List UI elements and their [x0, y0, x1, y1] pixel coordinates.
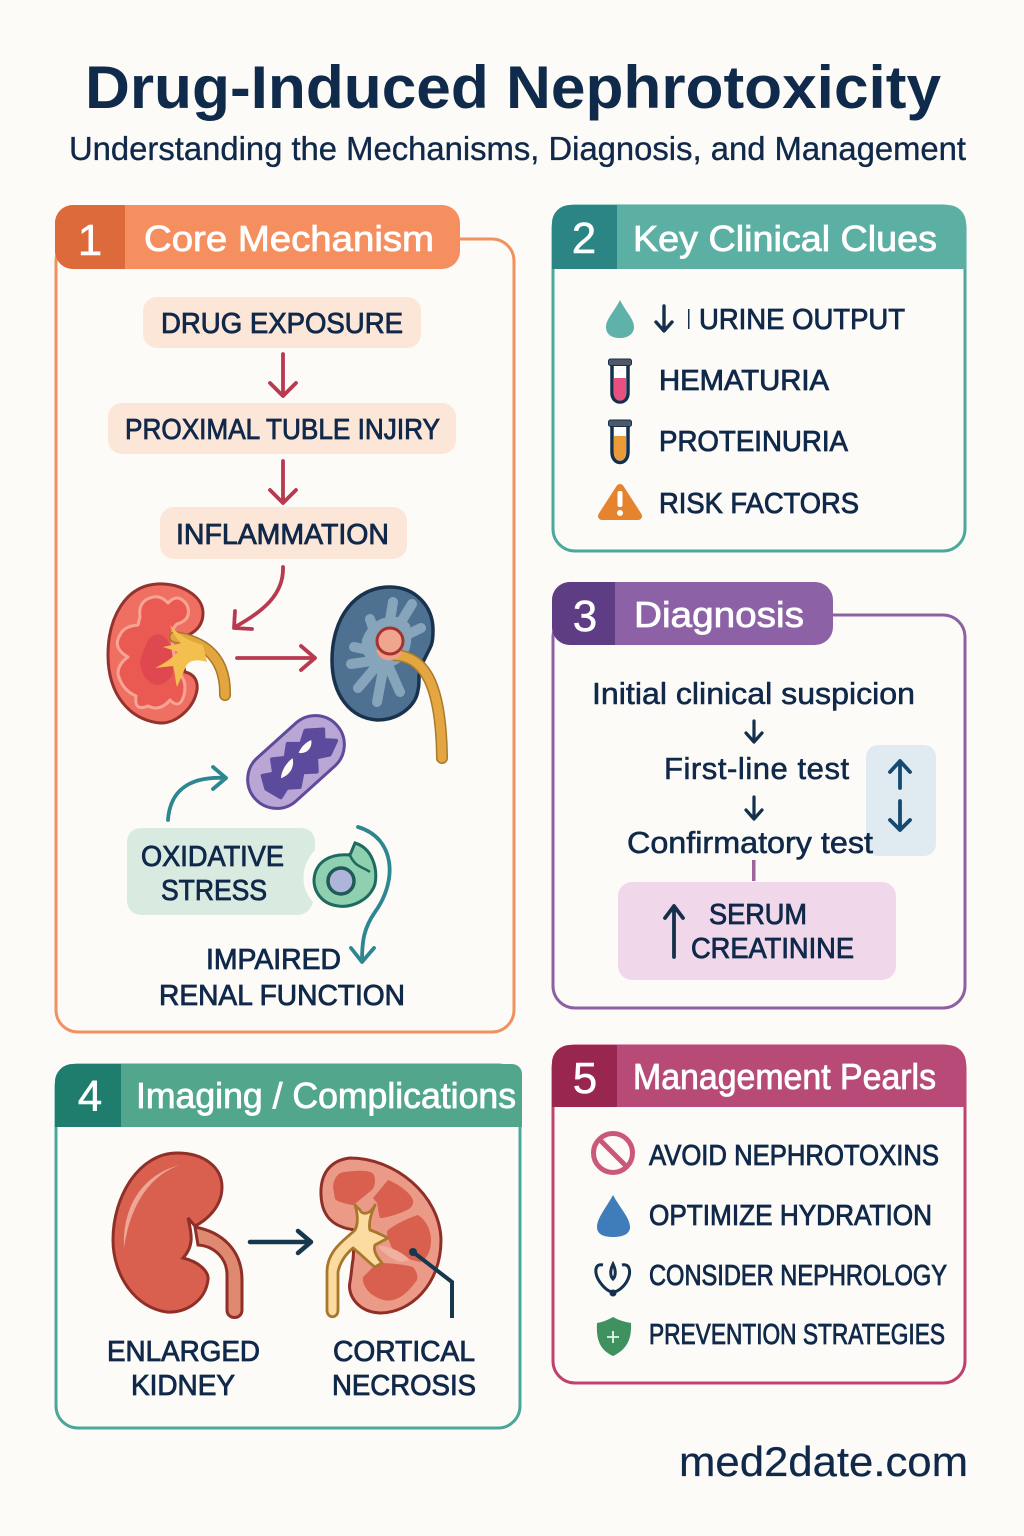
arrow: curved teal to mitochondrion: [168, 767, 226, 820]
clue: proteinuria: PROTEINURIA: [659, 426, 849, 458]
icon: cortical necrosis kidney: [321, 1158, 452, 1318]
panel: imaging and complications: [55, 1064, 522, 1428]
clue: risk factors: RISK FACTORS: [659, 488, 859, 520]
icon: enlarged kidney: [113, 1153, 242, 1318]
panel: management pearls: [552, 1045, 966, 1383]
pearl: prevention strategies: [597, 1317, 945, 1356]
pearl: avoid nephrotoxins: [594, 1134, 939, 1172]
step: proximal tubule injury: PROXIMAL TUBLE INJIRY: [125, 414, 440, 446]
arrow: inflamed to damaged kidney: [237, 646, 315, 670]
pearl: avoid nephrotoxins: AVOID NEPHROTOXINS: [649, 1140, 939, 1172]
panel 2 header: 2: [572, 214, 596, 263]
arrow: curved to kidney: [234, 567, 283, 629]
step: proximal tubule injury: [108, 403, 456, 454]
subtitle: Understanding the Mechanisms, Diagnosis, and Management: [69, 130, 966, 167]
clue: urine output: URINE OUTPUT: [699, 304, 905, 336]
step: confirmatory test: Confirmatory test: [627, 825, 873, 860]
label: cortical necrosis: NECROSIS: [332, 1370, 476, 1402]
pearl: optimize hydration: [597, 1195, 932, 1237]
pearl: consider nephrology: CONSIDER NEPHROLOGY: [649, 1260, 947, 1292]
text: impaired renal function: IMPAIRED: [206, 944, 341, 976]
side box: up and down arrows: [866, 745, 936, 856]
panel 3 header: [552, 582, 833, 645]
pearl: consider nephrology: [596, 1260, 947, 1296]
pearl: optimize hydration: OPTIMIZE HYDRATION: [649, 1200, 932, 1232]
panel 4 header: [55, 1064, 522, 1127]
panel 2 header: Key Clinical Clues: [633, 218, 937, 259]
panel 3 header: 3: [573, 592, 597, 641]
panel 5 header: 5: [573, 1054, 597, 1103]
arrow: injury to inflammation: [270, 461, 296, 503]
clue: proteinuria: [608, 420, 849, 462]
clue: urine output: [606, 300, 905, 338]
icon: cell: [314, 843, 376, 906]
step: drug exposure: DRUG EXPOSURE: [161, 308, 403, 340]
pearl: prevention strategies: PREVENTION STRATEGIES: [649, 1319, 945, 1351]
panel: diagnosis: [552, 582, 965, 1008]
panel 4 header: Imaging / Complications: [136, 1075, 516, 1116]
box: serum creatinine: [618, 882, 896, 980]
panel 1 header: [55, 205, 460, 269]
title: Drug-Induced Nephrotoxicity: [85, 54, 942, 121]
clue: hematuria: [608, 359, 830, 402]
box: serum creatinine: CREATININE: [691, 933, 854, 965]
text: impaired renal function: [159, 944, 405, 1012]
panel: core mechanism: [55, 205, 514, 1032]
step: first-line test: First-line test: [664, 751, 850, 786]
step: drug exposure: [143, 297, 421, 348]
connector to serum creatinine: [752, 860, 756, 881]
panel 1 header: Core Mechanism: [144, 218, 434, 259]
arrow: to necrosis: [250, 1231, 311, 1253]
step: initial clinical suspicion: Initial clinical suspicion: [592, 676, 915, 711]
arrow: down: [746, 797, 762, 819]
icon: mitochondrion: [236, 704, 356, 820]
panel 4 header: 4: [78, 1072, 102, 1121]
arrow: down: [746, 721, 762, 742]
step: inflammation: INFLAMMATION: [176, 519, 389, 551]
arrow: exposure to injury: [270, 354, 296, 396]
clue: hematuria: HEMATURIA: [659, 365, 830, 397]
step: inflammation: [160, 507, 407, 559]
arrow: teal down to impaired function: [351, 827, 390, 962]
panel 5 header: [552, 1045, 966, 1107]
box: serum creatinine: SERUM: [709, 899, 807, 931]
box: oxidative stress: [127, 828, 315, 915]
text: impaired renal function: RENAL FUNCTION: [159, 980, 405, 1012]
panel: key clinical clues: [552, 205, 966, 551]
label: cortical necrosis: CORTICAL: [333, 1336, 475, 1368]
footer brand: med2date.com: [679, 1438, 968, 1485]
label: enlarged kidney: ENLARGED: [107, 1336, 260, 1368]
panel 3 header: Diagnosis: [634, 594, 804, 635]
panel 5 header: Management Pearls: [633, 1056, 936, 1097]
label: enlarged kidney: KIDNEY: [131, 1370, 235, 1402]
panel 2 header: [552, 205, 966, 269]
panel 1 header: 1: [78, 216, 102, 265]
label: enlarged kidney: [107, 1336, 260, 1402]
icon: inflamed kidney: [108, 584, 225, 723]
box: oxidative stress: STRESS: [161, 875, 267, 907]
label: cortical necrosis: [332, 1336, 476, 1402]
icon: damaged blue kidney: [332, 587, 442, 758]
box: oxidative stress: OXIDATIVE: [141, 841, 284, 873]
